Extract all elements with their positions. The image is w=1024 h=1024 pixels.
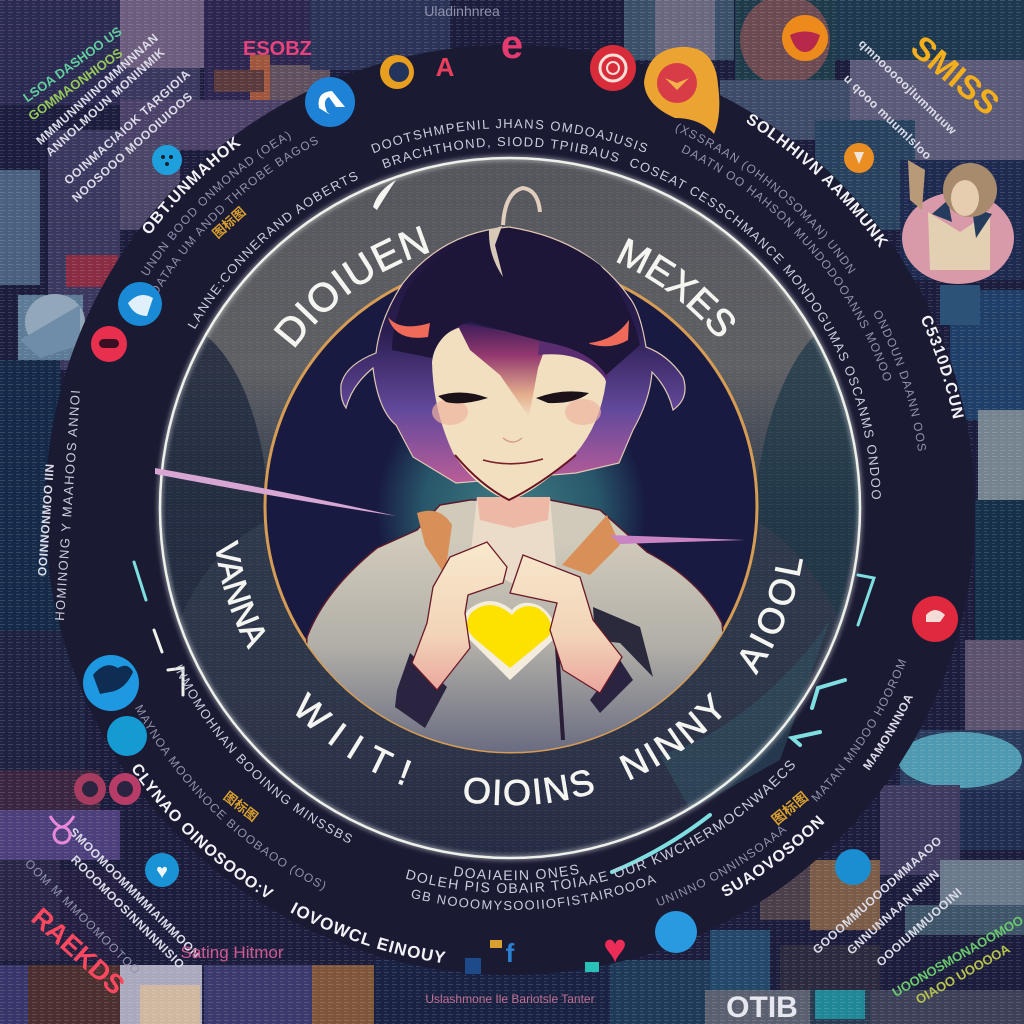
hoodie body: [300, 500, 735, 760]
icon: orange ring badge: [380, 55, 414, 89]
small ring text: lower left block: INMOMOHNAN BOOINNG MINSSBS: [174, 664, 352, 843]
collage label: white rows top left: NOOSOOO MOOOIUIOOS: [69, 89, 196, 205]
icon: blue heart badge: [145, 853, 179, 887]
icon: red spiral badge: [590, 45, 636, 91]
pink light streak left: [155, 468, 396, 516]
small ring text: upper left block: LANNE:CONNERAND AOBERTS: [188, 172, 358, 329]
collage label: OTIB: OTIB: [726, 991, 798, 1024]
cheek blush: [432, 399, 468, 425]
small ring text: upper right block: SOLHHIVN AAMMUNK: [746, 114, 889, 248]
small ring text: upper left block: UNDN BOOD ONMONAD (OEA): [140, 132, 291, 276]
small ring text: lower left block: IOVOWCL EINOUY: [290, 902, 446, 963]
collage label: pink bottom left: RAEKDS: [26, 902, 130, 1001]
small ring text: lower right block: MAMONNNOA: [862, 696, 913, 770]
icon: red pill badge: [91, 326, 127, 362]
icon: red heart: ♥: [603, 927, 627, 971]
icon: small gold and blue blocks: [465, 940, 599, 974]
upper hair cap: [392, 232, 640, 375]
small ring text: upper right block: ONDOUN DAANN OOS: [874, 310, 926, 451]
glowing heart: [463, 601, 555, 680]
small ring text: upper left block: OBT.UNMAHOK: [142, 136, 242, 234]
glass ring background: [160, 158, 860, 858]
small ring text: lower right block: UNINNO ONNINSOAAA: [656, 826, 787, 906]
icon: orange speech bubble: [644, 47, 719, 134]
collage label: white rows bottom right: GOOOMMUOOODMMAAOO: [810, 833, 945, 957]
front hair strand: [489, 226, 503, 277]
closed eye left: [438, 392, 488, 403]
small ring text: top: DOOTSHMPENIL JHANS OMDOAJUSIS: [371, 119, 648, 154]
small ring text: bottom block: DOAIAEIN ONES: [454, 864, 578, 880]
hair back: [341, 227, 685, 483]
small ring text: lower left block: [132, 664, 446, 963]
icon: blue face badge right: [835, 849, 871, 885]
cyan accent marks: [134, 562, 874, 872]
ring heading: lower left 1: VANNA: [216, 540, 266, 650]
small ring text: lower right block: SUAOVOSOON: [722, 815, 824, 896]
sleeve cuffs: [395, 653, 633, 728]
ring heading: lower left 2: WIIT!: [296, 691, 412, 786]
zipper line: [557, 647, 563, 740]
collage label: white rows top right: u qooo muumlsloo: [841, 71, 935, 163]
icon: orange dot badge: [844, 143, 874, 173]
white swoosh: [373, 180, 396, 210]
neck and collar: [470, 497, 556, 585]
collage label: white rows top right: qmnooooojlummuuw: [856, 37, 960, 138]
left hand: [412, 542, 507, 690]
fringe: [456, 322, 548, 417]
smile: [483, 459, 543, 464]
heart fill: [467, 605, 551, 668]
small ring text: upper right block: C5310D.CUN: [922, 316, 964, 418]
small ring text: upper right block: COSEAT CESSCHMANCE MONDOGUMAS OSCANMS ONDOO: [630, 158, 881, 499]
orange hair clip left: [388, 317, 430, 338]
gold portrait ring: [265, 260, 757, 752]
left vertical ring text: OOINNONMOO IIN: [35, 463, 57, 577]
collage label: green bottom right: UOONOSMONAOOMOO: [890, 912, 1024, 1000]
chest badge: [593, 607, 653, 677]
collage label: pink top: ESOBZ: [243, 38, 312, 60]
collage label: bottom strip: Uslashmone Ile Bariotsle Tanter: [425, 992, 595, 1006]
orange hair clip right: [589, 320, 629, 346]
gold tag upper left: 图标图: [209, 204, 249, 241]
collage label: white rows top left: MMMUNNNINOMMNNNAN: [33, 30, 161, 148]
small ring text: upper right block: (XSSRAAN (OHHNOSOMAN) UNDN: [676, 124, 856, 274]
icon: blue face badge bottom: [655, 911, 697, 953]
icon: red right badge: [912, 596, 958, 642]
collage figure: girl with pink jacket: [902, 160, 1014, 325]
small ring text: lower left block: MAYNOA MOONNOCE BIOOBAOO (OOS): [135, 704, 326, 892]
left vertical ring text: HOMINONG Y MAAHOOS ANNOI: [52, 388, 83, 621]
collage label: white rows top right: [841, 37, 960, 163]
collage label: top center: Uladinhnrea: [424, 3, 500, 19]
small ring text: lower right block: MATAN MNDOO HOOROM: [811, 659, 906, 802]
closed eye right: [536, 391, 589, 403]
icon: pink collage badges: [74, 773, 141, 805]
icon: orange face badge: [782, 15, 828, 61]
icon: pink letter: e: [501, 23, 523, 67]
small ring text: bottom block: DOLEH PIS OBAIR TOIAAE OUR KWCHERMOCNWAECS: [406, 760, 795, 893]
neck shadow: [477, 497, 550, 528]
small ring text: upper right block: [630, 114, 964, 499]
collage glyph: glowing pink: [50, 816, 74, 843]
icon: blue share badge: [305, 77, 355, 127]
collage label: white rows bottom left: OOM M MMOOMOOTOO: [22, 856, 144, 978]
icon: large blue badge: [83, 655, 139, 711]
small ring text: bottom block: GB NOOOMYSOOIIOFISTAIROOOA: [412, 875, 656, 910]
ring heading: lower right 1: NINNY: [619, 692, 722, 780]
collage label: bottom banner: Sating Hitmor: [181, 943, 284, 962]
collage label: green bottom right: OIAOO UOOOOA: [913, 941, 1013, 1007]
ring heading: bottom: OIOINS: [464, 770, 594, 806]
collage figure: blue sketch portrait: [20, 294, 85, 358]
small ring text: upper left block: DATAA UM ANDD THROBE BAGOS: [154, 136, 318, 293]
left vertical ring text: [35, 388, 83, 621]
gold tag lower right: 图标图: [769, 789, 811, 828]
collage label: white rows bottom left: SMOOMOOMMMMIAIMMOON: [66, 825, 203, 962]
small ring text: top: [371, 119, 648, 168]
collage label: white rows bottom left: [22, 825, 203, 978]
icon: blue heart badge: ♥: [156, 861, 168, 883]
face: [432, 325, 606, 498]
icon: blue lower badge: [107, 716, 147, 756]
collage label: white rows top left: ANNOLMOUN MONINMIK: [43, 45, 168, 159]
collage label: white rows top left: [33, 30, 196, 205]
icon: red glyph: A: [436, 52, 455, 82]
chin line: [455, 455, 576, 500]
icon: facebook letter: f: [506, 938, 515, 968]
orange hood lining: [417, 511, 620, 575]
collage label: white rows top left: OOINMACIAIOK TARGIOIA: [61, 67, 193, 187]
pink light streak right: [610, 535, 745, 544]
nose: [503, 438, 522, 442]
right hand: [510, 555, 622, 693]
collage label: green top left: LSOA DASHOO US: [20, 23, 125, 105]
icon: blue bird badge: [118, 282, 162, 326]
collage label: yellow top right: SMISS: [904, 28, 1007, 122]
collage label: white rows bottom left: ROOOMOOSINNNNNISIO: [68, 852, 188, 972]
ring heading: top right: MEXES: [616, 238, 735, 336]
character head: [341, 227, 685, 500]
gold tag lower left: 图标图: [221, 789, 261, 824]
small ring text: lower left block: CLYNAO OINOSOOO:V: [132, 764, 274, 898]
character body: [300, 497, 735, 760]
small ring text: top: BRACHTHOND, SIODD TPIIBAUS: [382, 137, 619, 168]
collage label: green top left: GOMMAONHIOOS: [25, 45, 126, 124]
ring heading: top left: DIOIUEN: [274, 226, 430, 348]
right fringe: [538, 325, 625, 380]
white glowing ring: [160, 158, 860, 858]
collage label: white rows bottom right: OOOIUMMUOOINI: [874, 885, 965, 969]
small ring text: lower right block: [656, 659, 913, 906]
icon: cyan dots badge: [152, 145, 182, 175]
ahoge hair strand: [503, 188, 540, 225]
small ring text: upper left block: [140, 132, 358, 329]
collage label: white rows bottom right: GNNUNNAAN NNIN: [844, 867, 942, 957]
portrait medallion backdrop: [265, 260, 757, 752]
small ring text: upper right block: DAATN OO HAHSON MUNDODOOANNS MONOO: [682, 144, 892, 381]
ring heading: lower right 2: AIOOL: [740, 558, 803, 676]
